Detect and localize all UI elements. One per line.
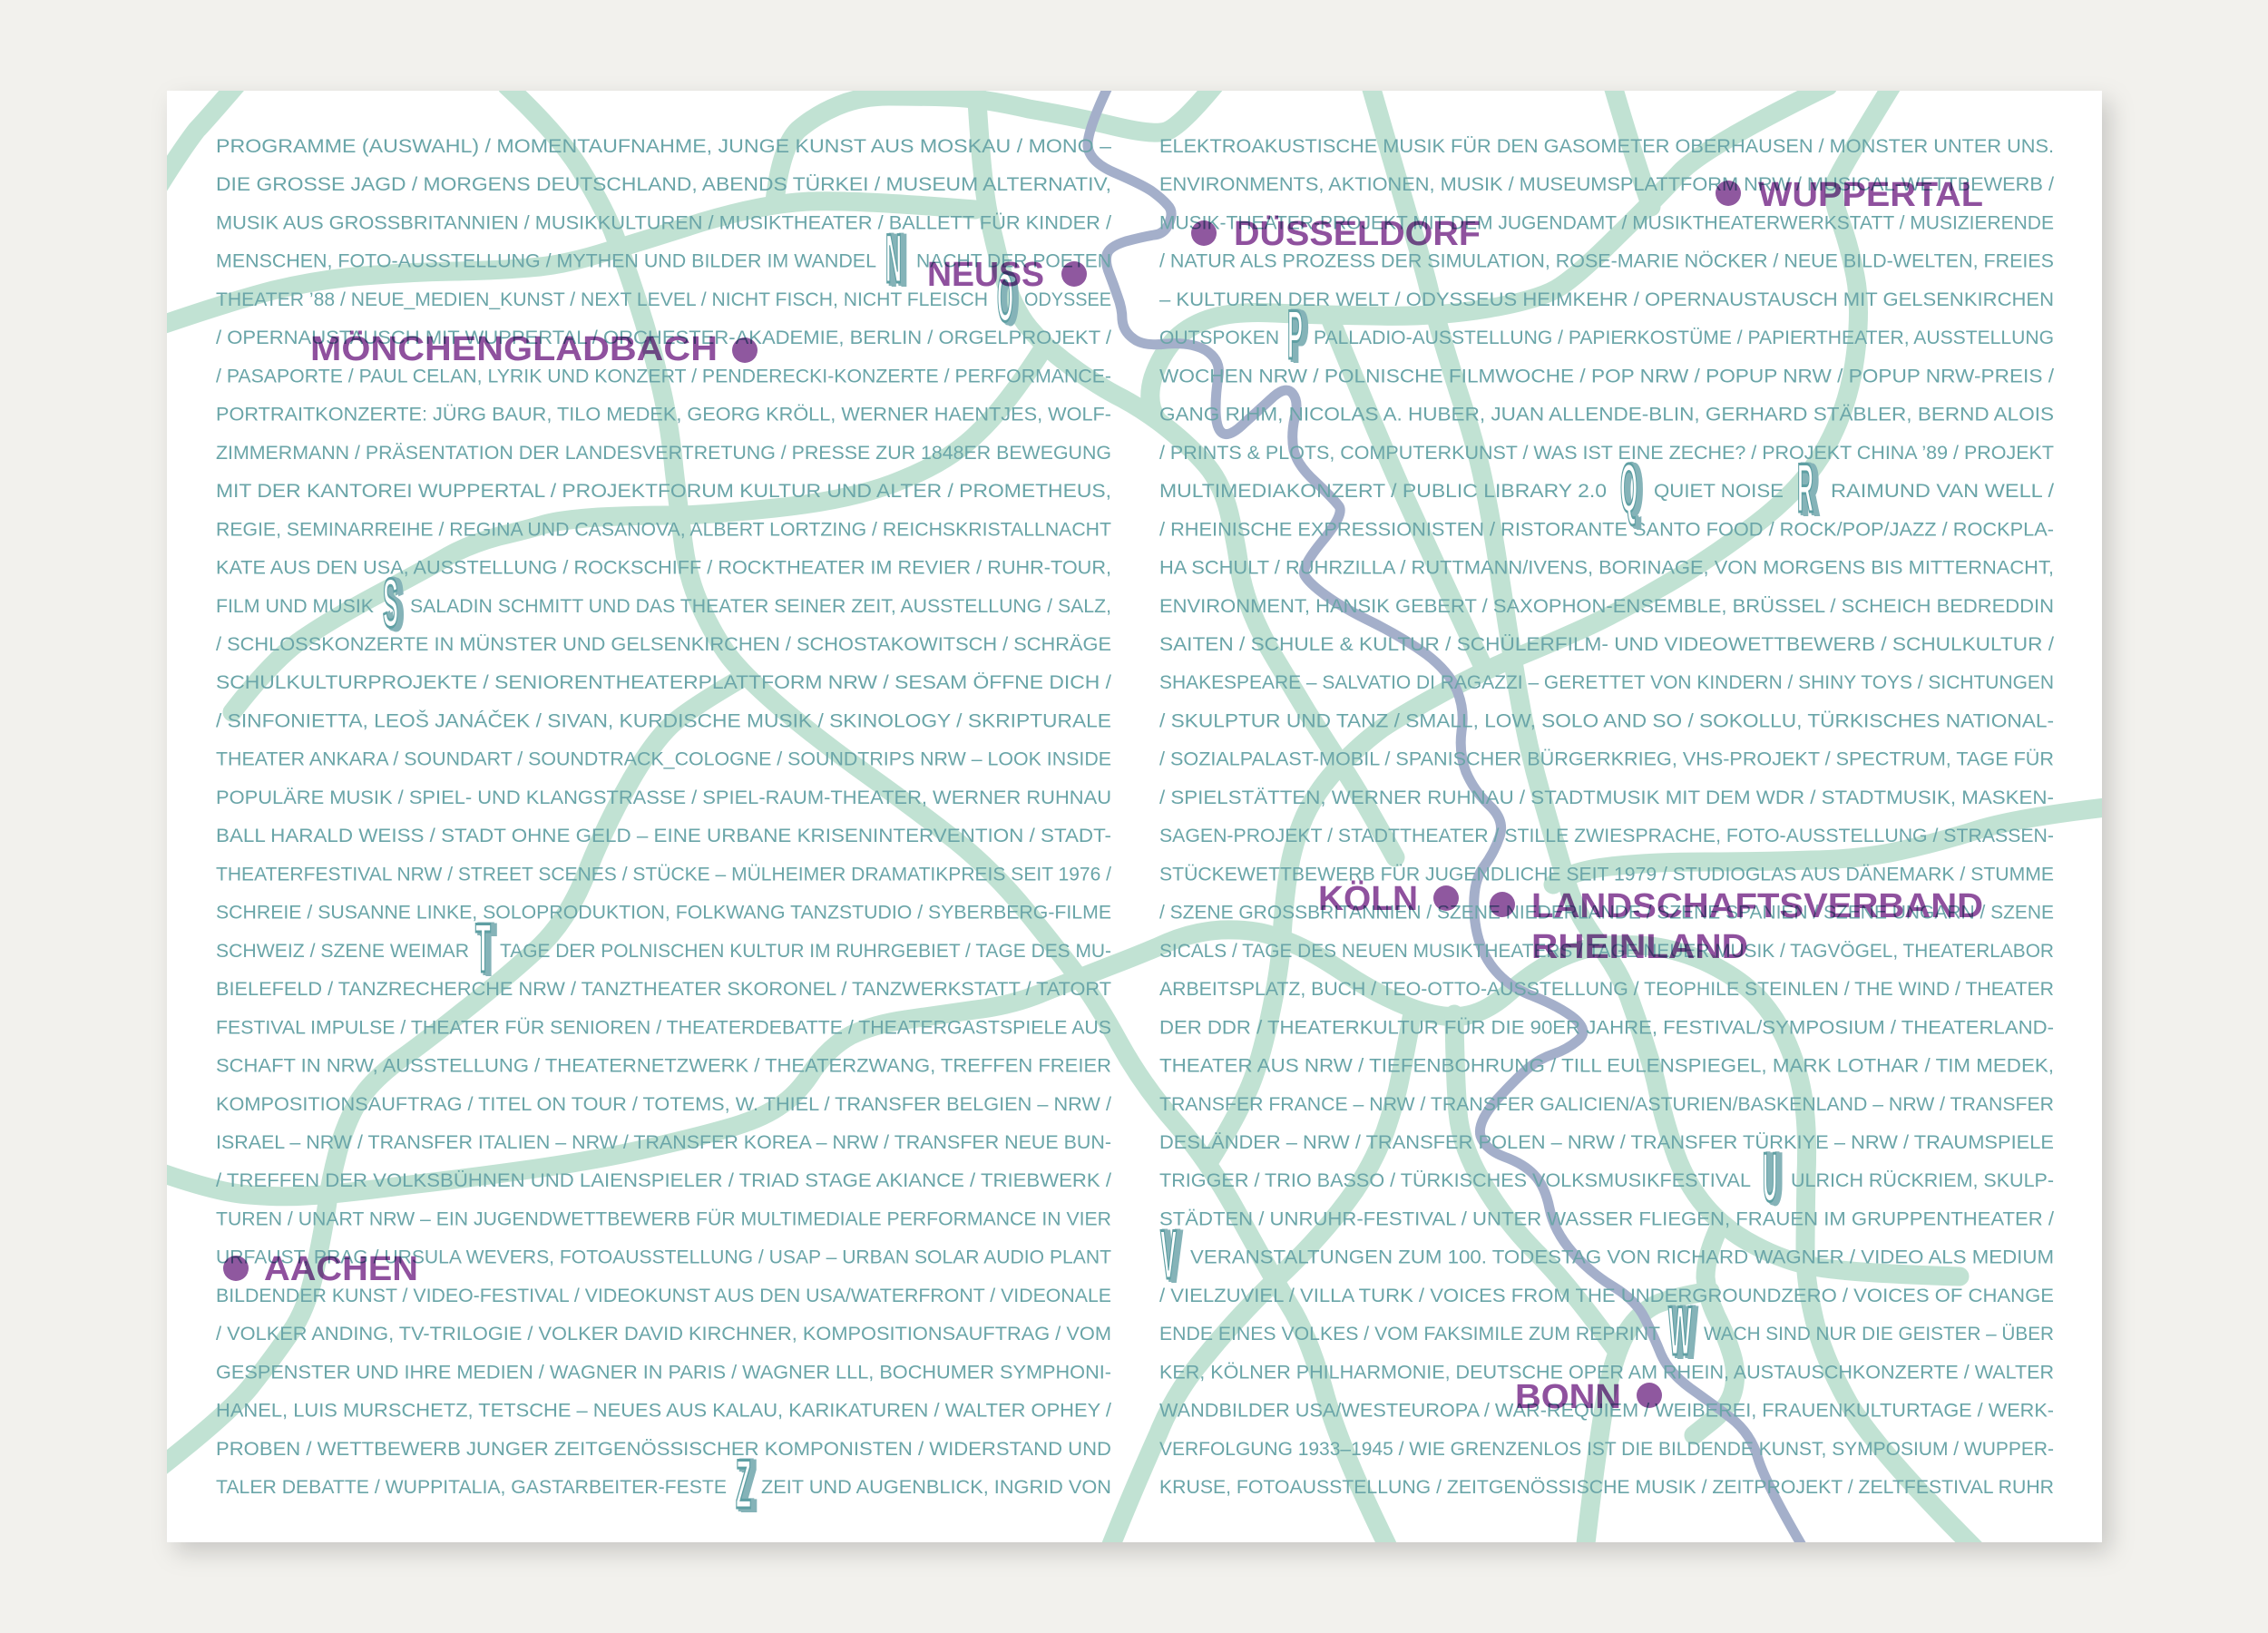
initial letters: S [383,565,398,642]
text block: left column: THEATERFESTIVAL NRW / STREET SCENES / STÜCKE – MÜLHEIMER DRAMATIKPREIS SEIT 1976 / [216,863,1111,885]
initial letters: Z [738,1447,754,1524]
initial letters: U [1768,1141,1783,1218]
text block: right column: MUSIK-THEATER-PROJEKT MIT DEM JUGENDAMT / MUSIKTHEATERWERKSTATT / MUSIZIERENDE [1159,212,2054,234]
text: R [1803,452,1819,529]
text block: left column: DIE GROSSE JAGD / MORGENS DEUTSCHLAND, ABENDS TÜRKEI / MUSEUM ALTERNATIV, [216,173,1111,195]
text block: right column: MULTIMEDIAKONZERT / PUBLIC LIBRARY 2.0 [1159,480,1607,502]
city label: Neuss: NEUSS [927,256,1044,294]
text block: left column: SALADIN SCHMITT UND DAS THEATER SEINER ZEIT, AUSSTELLUNG / SALZ, [410,595,1111,617]
text block: left column: BALL HARALD WEISS / STADT OHNE GELD – EINE URBANE KRISENINTERVENTION / STADT- [216,825,1111,846]
text block: left column: TUREN / UNART NRW – EIN JUGENDWETTBEWERB FÜR MULTIMEDIALE PERFORMANCE IN VIER [216,1208,1111,1229]
initial V [1160,1217,1182,1296]
text block: left column: MIT DER KANTOREI WUPPERTAL / PROJEKTFORUM KULTUR UND ALTER / PROMETHEUS, [216,480,1111,502]
text block: left column: URFAUST, PRAG / URSULA WEVERS, FOTOAUSSTELLUNG / USAP – URBAN SOLAR AUDIO PLANT [216,1247,1111,1268]
text block: left column: GESPENSTER UND IHRE MEDIEN / WAGNER IN PARIS / WAGNER LLL, BOCHUMER SYMPHONI- [216,1361,1111,1383]
initial R [1797,450,1819,529]
initial letters: T [475,910,491,987]
city label: Mönchengladbach: MÖNCHENGLADBACH [310,329,718,368]
text block: left column: ISRAEL – NRW / TRANSFER ITALIEN – NRW / TRANSFER KOREA – NRW / TRANSFER NEUE BUN- [216,1131,1111,1153]
initial T [475,910,496,989]
text block: right column: HA SCHULT / RUHRZILLA / RUTTMANN/IVENS, BORINAGE, VON MORGENS BIS MITTERNACHT, [1159,557,2054,579]
text block: left column: THEATER ANKARA / SOUNDART / SOUNDTRACK_COLOGNE / SOUNDTRIPS NRW – LOOK INSIDE [216,748,1111,770]
text block: left column: BIELEFELD / TANZRECHERCHE NRW / TANZTHEATER SKORONEL / TANZWERKSTATT / TATORT [216,978,1111,1000]
text block: left column: KOMPOSITIONSAUFTRAG / TITEL ON TOUR / TOTEMS, W. THIEL / TRANSFER BELGIEN – NRW / [216,1093,1111,1115]
text block: right column: / NATUR ALS PROZESS DER SIMULATION, ROSE-MARIE NÖCKER / NEUE BILD-WELTEN, FREIES [1159,250,2054,272]
text block: right column: SAITEN / SCHULE & KULTUR / SCHÜLERFILM- UND VIDEOWETTBEWERB / SCHULKULTUR / [1159,633,2054,655]
text block: right column: / PRINTS & PLOTS, COMPUTERKUNST / WAS IST EINE ZECHE? / PROJEKT CHINA ’89 / PROJEKT [1159,442,2054,464]
text block: left column: / SINFONIETTA, LEOŠ JANÁČEK / SIVAN, KURDISCHE MUSIK / SKINOLOGY / SKRIPTURALE [216,709,1111,731]
initial O [997,259,1019,338]
text block: right column: THEATER AUS NRW / TIEFENBOHRUNG / TILL EULENSPIEGEL, MARK LOTHAR / TIM MEDEK, [1159,1054,2054,1076]
initial letters: S [388,567,404,644]
text block: left column: REGIE, SEMINARREIHE / REGINA UND CASANOVA, ALBERT LORTZING / REICHSKRISTALLNACHT [216,518,1111,540]
text block: left column: SCHULKULTURPROJEKTE / SENIORENTHEATERPLATTFORM NRW / SESAM ÖFFNE DICH / [216,671,1111,693]
initial letters: U [1765,1140,1780,1217]
text block: left column: HANEL, LUIS MURSCHETZ, TETSCHE – NEUES AUS KALAU, KARIKATUREN / WALTER OPHEY / [216,1400,1111,1422]
text block: left column [216,135,1111,1498]
text block: left column: / OPERNAUSTAUSCH MIT WUPPERTAL / ORCHESTER-AKADEMIE, BERLIN / ORGELPROJEKT / [216,327,1111,348]
initial letters: Q [1623,451,1640,528]
text block: right column: VERFOLGUNG 1933–1945 / WIE GRENZENLOS IST DIE BILDENDE KUNST, SYMPOSIUM / WUPPER- [1159,1438,2054,1460]
initial letters: T [478,911,494,988]
text block: right column: GANG RIHM, NICOLAS A. HUBER, JUAN ALLENDE-BLIN, GERHARD STÄBLER, BERND ALOIS [1159,404,2054,425]
text block: right column: STÜCKEWETTBEWERB FÜR JUGENDLICHE SEIT 1979 / STUDIOGLAS AUS DÄNEMARK / STUMME [1159,863,2054,885]
text block: right column: QUIET NOISE [1654,480,1784,502]
text block: right column: KRUSE, FOTOAUSSTELLUNG / ZEITGENÖSSISCHE MUSIK / ZEITPROJEKT / ZELTFESTIVAL RUHR [1159,1476,2054,1498]
river: Rhein [1088,82,1805,1551]
text block: right column: ARBEITSPLATZ, BUCH / TEO-OTTO-AUSSTELLUNG / TEOPHILE STEINLEN / THE WIND / THEATER [1159,978,2054,1000]
initial N [885,220,907,299]
initial letters: P [1290,298,1305,375]
initial letters: O [997,259,1013,337]
text block: left column: PROGRAMME (AUSWAHL) / MOMENTAUFNAHME, JUNGE KUNST AUS MOSKAU / MONO – [216,135,1111,157]
text block: left column: KATE AUS DEN USA, AUSSTELLUNG / ROCKSCHIFF / ROCKTHEATER IM REVIER / RUHR-TOUR, [216,557,1111,579]
text block: right column: TRIGGER / TRIO BASSO / TÜRKISCHES VOLKSMUSIKFESTIVAL [1159,1169,1751,1191]
initial S [383,565,404,644]
city label: Wuppertal: WUPPERTAL [1758,176,1983,214]
text block: left column: SCHREIE / SUSANNE LINKE, SOLOPRODUKTION, FOLKWANG TANZSTUDIO / SYBERBERG-FILME [216,902,1111,924]
initial letters: Z [736,1446,751,1523]
initial letters: W [1668,1293,1692,1370]
initial letters: Q [1626,452,1643,529]
initial letters: V [1160,1217,1177,1294]
text block: right column: ENVIRONMENT, HANSIK GEBERT / SAXOPHON-ENSEMBLE, BRÜSSEL / SCHEICH BEDREDDIN [1159,595,2054,617]
text block: right column: / RHEINISCHE EXPRESSIONISTEN / RISTORANTE SANTO FOOD / ROCK/POP/JAZZ / ROCKPLA- [1159,518,2054,540]
text block: right column: OUTSPOKEN [1159,327,1279,348]
initial letters: V [1166,1218,1182,1296]
text block: right column: WANDBILDER USA/WESTEUROPA / WAR-REQUIEM / WEIBEREI, FRAUENKULTURTAGE / WERK- [1159,1400,2054,1422]
text block: right column: WACH SIND NUR DIE GEISTER – ÜBER [1704,1323,2054,1345]
city label: Landschaftsverband Rheinland [1490,887,1983,966]
initial Q [1620,450,1643,529]
text block: right column: / SPIELSTÄTTEN, WERNER RUHNAU / STADTMUSIK MIT DEM WDR / STADTMUSIK, MASKEN- [1159,787,2054,808]
initial letters: P [1293,298,1308,376]
city label: Landschaftsverband Rheinland: RHEINLAND [1531,928,1748,966]
initial letters: U [1763,1139,1777,1217]
text block: left column: ODYSSEE [1024,288,1111,310]
text block: left column: SCHAFT IN NRW, AUSSTELLUNG / THEATERNETZWERK / THEATERZWANG, TREFFEN FREIER [216,1054,1111,1076]
initial letters [383,220,1819,1525]
text block: left column: PROBEN / WETTBEWERB JUNGER ZEITGENÖSSISCHER KOMPONISTEN / WIDERSTAND UND [216,1438,1111,1460]
text block: left column: POPULÄRE MUSIK / SPIEL- UND KLANGSTRASSE / SPIEL-RAUM-THEATER, WERNER RUHNAU [216,787,1111,808]
text block: right column: RAIMUND VAN WELL / [1831,480,2054,502]
text block: right column: ULRICH RÜCKRIEM, SKULP- [1791,1169,2054,1191]
initial letters: T [481,912,496,989]
text block: left column: BILDENDER KUNST / VIDEO-FESTIVAL / VIDEOKUNST AUS DEN USA/WATERFRONT / VIDEONALE [216,1285,1111,1306]
initial letters: W [1674,1295,1697,1372]
initial letters: P [1287,297,1303,374]
initial letters: Q [1620,450,1637,527]
initial letters: O [1000,260,1016,337]
text block: right column: ENVIRONMENTS, AKTIONEN, MUSIK / MUSEUMSPLATTFORM NRW / MUSICAL-WETTBEWERB / [1159,173,2054,195]
city label: Landschaftsverband Rheinland: LANDSCHAFTSVERBAND [1531,887,1983,925]
initial letters: V [1163,1217,1179,1295]
panel: white sheet [167,91,2102,1542]
text block: left column: TALER DEBATTE / WUPPITALIA, GASTARBEITER-FESTE [216,1476,727,1498]
text block: right column [1159,135,2054,1498]
text block: left column: SCHWEIZ / SZENE WEIMAR [216,940,469,962]
text block: right column: VERANSTALTUNGEN ZUM 100. TODESTAG VON RICHARD WAGNER / VIDEO ALS MEDIUM [1190,1247,2054,1268]
text block: right column: TRANSFER FRANCE – NRW / TRANSFER GALICIEN/ASTURIEN/BASKENLAND – NRW / TRANSFER [1159,1093,2054,1115]
road network [145,77,2114,1551]
text block: left column: FILM UND MUSIK [216,595,375,617]
text: R [1800,451,1816,528]
text block: left column: THEATER ’88 / NEUE_MEDIEN_KUNST / NEXT LEVEL / NICHT FISCH, NICHT FLEISCH [216,288,988,310]
text block: right column: SHAKESPEARE – SALVATIO DI RAGAZZI – GERETTET VON KINDERN / SHINY TOYS / SICHTUNGEN [1159,671,2054,693]
initial letters: N [885,220,902,298]
text block: left column: TAGE DER POLNISCHEN KULTUR IM RUHRGEBIET / TAGE DES MU- [500,940,1111,962]
initial letters: N [891,222,907,299]
text block: left column: / PASAPORTE / PAUL CELAN, LYRIK UND KONZERT / PENDERECKI-KONZERTE / PERFORMANCE- [216,365,1111,386]
text block: left column: / TREFFEN DER VOLKSBÜHNEN UND LAIENSPIELER / TRIAD STAGE AKIANCE / TRIEBWERK / [216,1169,1111,1191]
text block: left column: MUSIK AUS GROSSBRITANNIEN / MUSIKKULTUREN / MUSIKTHEATER / BALLETT FÜR KINDER / [216,212,1111,234]
text block: right column: / VIELZUVIEL / VILLA TURK / VOICES FROM THE UNDERGROUNDZERO / VOICES OF CHANGE [1159,1285,2054,1306]
initial letters: N [888,221,904,298]
city label: Aachen: AACHEN [264,1250,418,1288]
city label: Düsseldorf: DÜSSELDORF [1234,214,1481,253]
text block: right column: WOCHEN NRW / POLNISCHE FILMWOCHE / POP NRW / POPUP NRW / POPUP NRW-PREIS / [1159,365,2054,386]
text block: right column: DESLÄNDER – NRW / TRANSFER POLEN – NRW / TRANSFER TÜRKIYE – NRW / TRAUMSPIELE [1159,1131,2054,1153]
text block: left column: / SCHLOSSKONZERTE IN MÜNSTER UND GELSENKIRCHEN / SCHOSTAKOWITSCH / SCHRÄGE [216,633,1111,655]
text block: right column: STÄDTEN / UNRUHR-FESTIVAL / UNTER WASSER FLIEGEN, FRAUEN IM GRUPPENTHEATER / [1159,1208,2054,1229]
text block: right column: DER DDR / THEATERKULTUR FÜR DIE 90ER JAHRE, FESTIVAL/SYMPOSIUM / THEATERLAND- [1159,1016,2054,1038]
initial W [1668,1293,1697,1372]
text block: left column: FESTIVAL IMPULSE / THEATER FÜR SENIOREN / THEATERDEBATTE / THEATERGASTSPIELE AUS [216,1016,1111,1038]
city label: Bonn [1515,1378,1662,1416]
text block: right column: / SKULPTUR UND TANZ / SMALL, LOW, SOLO AND SO / SOKOLLU, TÜRKISCHES NATIONAL- [1159,709,2054,731]
text block: left column: PORTRAITKONZERTE: JÜRG BAUR, TILO MEDEK, GEORG KRÖLL, WERNER HAENTJES, WOLF- [216,404,1111,425]
initial letters: Z [741,1448,757,1525]
text block: right column: SICALS / TAGE DES NEUEN MUSIKTHEATERS / TAGE NEUER MUSIK / TAGVÖGEL, THEATERLABOR [1159,940,2054,962]
text block: right column: / SOZIALPALAST-MOBIL / SPANISCHER BÜRGERKRIEG, VHS-PROJEKT / SPECTRUM, TAGE FÜR [1159,748,2054,770]
text: R [1797,450,1813,527]
city label: Köln [1318,879,1459,918]
text block: right column: SAGEN-PROJEKT / STADTTHEATER / STILLE ZWIESPRACHE, FOTO-AUSSTELLUNG / STRASSEN- [1159,825,2054,846]
initial P [1287,297,1308,376]
text block: right column: – KULTUREN DER WELT / ODYSSEUS HEIMKEHR / OPERNAUSTAUSCH MIT GELSENKIRCHEN [1159,288,2054,310]
text block: left column: ZEIT UND AUGENBLICK, INGRID VON [761,1476,1111,1498]
initial letters: S [386,566,401,643]
text block: right column: KER, KÖLNER PHILHARMONIE, DEUTSCHE OPER AM RHEIN, AUSTAUSCHKONZERTE / WALTER [1159,1361,2054,1383]
text block: right column: PALLADIO-AUSSTELLUNG / PAPIERKOSTÜME / PAPIERTHEATER, AUSSTELLUNG [1314,327,2054,348]
city label: Bonn: BONN [1515,1378,1621,1416]
text block: left column: MENSCHEN, FOTO-AUSSTELLUNG / MYTHEN UND BILDER IM WANDEL [216,250,876,272]
initial U [1763,1139,1783,1218]
text block: left column: / VOLKER ANDING, TV-TRILOGIE / VOLKER DAVID KIRCHNER, KOMPOSITIONSAUFTRAG / VOM [216,1323,1111,1345]
initial letters: O [1002,261,1019,338]
initial letters: W [1671,1294,1695,1371]
text block: right column: ELEKTROAKUSTISCHE MUSIK FÜR DEN GASOMETER OBERHAUSEN / MONSTER UNTER UNS. [1159,135,2054,157]
text block: right column: ENDE EINES VOLKES / VOM FAKSIMILE ZUM REPRINT [1159,1323,1660,1345]
initial Z [736,1446,757,1525]
city label: Köln: KÖLN [1318,879,1418,918]
text block: right column: / SZENE GROSSBRITANNIEN / SZENE NIEDERLANDE / SZENE SPANIEN / SZENE UNGARN / SZENE [1159,902,2054,924]
text block: left column: ZIMMERMANN / PRÄSENTATION DER LANDESVERTRETUNG / PRESSE ZUR 1848ER BEWEGUNG [216,442,1111,464]
text block: left column: NACHT DER POETEN [916,250,1111,272]
